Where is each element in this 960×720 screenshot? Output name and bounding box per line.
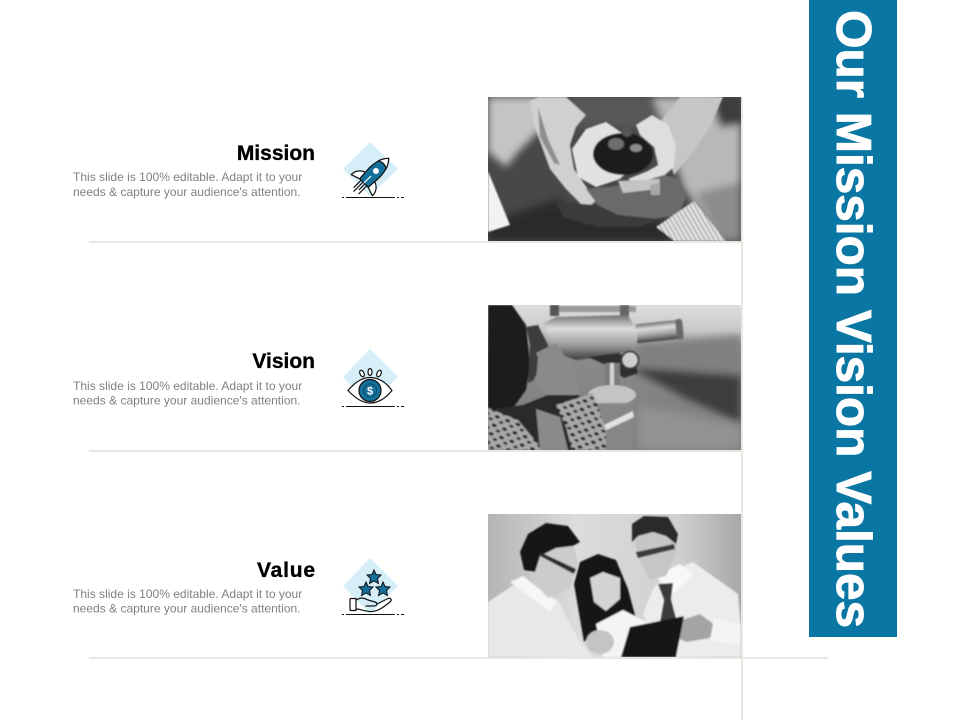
heading: vision: Vision xyxy=(252,350,315,373)
icon: rocket xyxy=(342,142,404,203)
title banner xyxy=(809,0,897,637)
panel: value xyxy=(73,558,404,616)
heading: mission: Mission xyxy=(237,142,315,165)
title: Our Mission Vision Values xyxy=(826,10,881,628)
row divider: vision xyxy=(89,450,741,452)
icon: hand with stars xyxy=(342,558,404,614)
text block: vision: needs & capture your audience's attention. xyxy=(73,394,301,408)
vertical divider line xyxy=(741,97,743,720)
text block: value: This slide is 100% editable. Adapt it to your xyxy=(73,587,302,601)
icon: eye with dollar xyxy=(342,349,404,406)
panel: vision xyxy=(73,349,404,408)
photo: woman at telescope xyxy=(488,305,741,450)
text block: mission: This slide is 100% editable. Adapt it to your xyxy=(73,170,302,184)
row divider: value xyxy=(89,657,828,659)
row divider: mission xyxy=(89,241,741,243)
photo: three colleagues with clipboard xyxy=(488,514,741,657)
photo: hands holding seedling xyxy=(488,97,741,241)
heading: value: Value xyxy=(257,559,315,582)
icon: eye with dollar: $ xyxy=(367,386,373,398)
text block: mission: needs & capture your audience's attention. xyxy=(73,185,301,199)
panel: mission xyxy=(73,142,404,203)
text block: vision: This slide is 100% editable. Adapt it to your xyxy=(73,379,302,393)
text block: value: needs & capture your audience's attention. xyxy=(73,602,301,616)
